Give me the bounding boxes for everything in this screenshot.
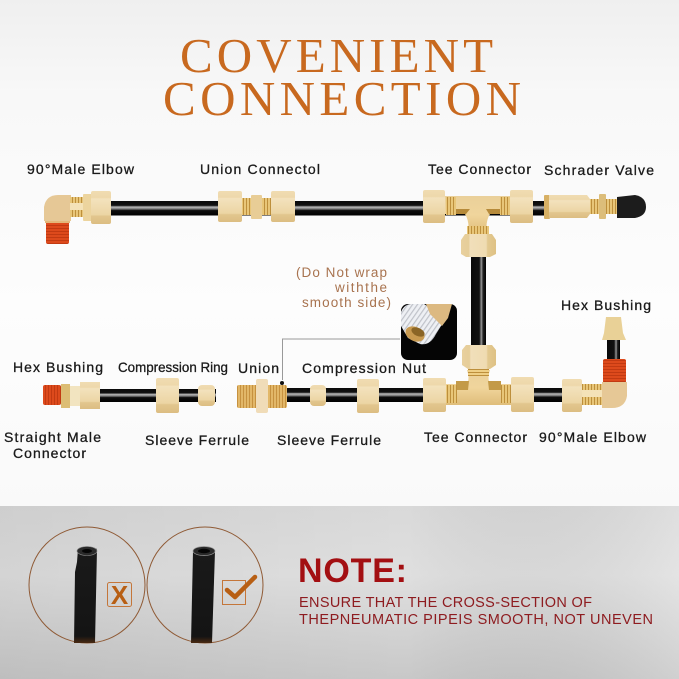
label: 90 male elbow top: 90°Male Elbow: [27, 161, 135, 177]
note text: ENSURE THAT THE CROSS-SECTION OF: [299, 595, 592, 611]
heading: note: NOTE:: [298, 552, 407, 590]
label: compression nut: Compression Nut: [302, 360, 426, 376]
callout leader line: [280, 339, 400, 385]
label: sleeve ferrule right: Sleeve Ferrule: [277, 432, 381, 448]
title: CONNECTION: [163, 71, 521, 126]
circle: incorrect cut pipe: [29, 527, 145, 643]
title: [163, 28, 521, 126]
label: tee connector bottom: Tee Connector: [424, 429, 527, 445]
top-left 90 degree male elbow: [44, 191, 111, 244]
label: sleeve ferrule left: Sleeve Ferrule: [145, 432, 249, 448]
wrap warning note: (Do Not wrap: [296, 265, 387, 280]
labels: [4, 161, 654, 461]
sleeve ferrule left: [198, 385, 215, 406]
label: 90 male elbow bottom: 90°Male Elbow: [539, 429, 647, 445]
title: COVENIENT: [180, 28, 493, 83]
vertical pipe between tee connectors: [471, 255, 486, 347]
label: union connectol: Union Connectol: [200, 161, 320, 177]
panel: note: [0, 506, 679, 679]
top horizontal pipe: [105, 201, 550, 216]
union connector: [218, 191, 295, 222]
compression nut right: [357, 379, 379, 413]
label: schrader valve: Schrader Valve: [544, 162, 654, 178]
note text: [299, 595, 653, 628]
sleeve ferrule right: [310, 385, 326, 406]
label: straight male connector: [4, 429, 101, 461]
icon: X mark: X: [111, 580, 129, 610]
wrap warning note: withthe: [334, 280, 387, 295]
compression nut left: [156, 378, 179, 413]
icon: check mark: [222, 577, 255, 604]
inset photo: threaded union: [401, 304, 457, 360]
lower tee connector: [423, 345, 534, 412]
label: straight male connector: Connector: [13, 445, 86, 461]
wrap warning note: [296, 265, 391, 310]
circle: correct cut pipe: [147, 527, 263, 643]
threaded union: [237, 379, 287, 413]
note text: THEPNEUMATIC PIPEIS SMOOTH, NOT UNEVEN: [299, 612, 653, 628]
label: straight male connector: Straight Male: [4, 429, 101, 445]
label: hex bushing left: Hex Bushing: [13, 359, 103, 375]
bottom pipe assembly: [43, 317, 627, 413]
lower pipe left segment: [100, 389, 216, 402]
schrader valve: [544, 194, 646, 219]
wrap warning note: smooth side): [302, 295, 391, 310]
right 90 degree male elbow with hex bushing: [562, 317, 627, 412]
label: compression ring: Compression Ring: [118, 359, 228, 375]
label: hex bushing right: Hex Bushing: [561, 297, 651, 313]
label: tee connector top: Tee Connector: [428, 161, 531, 177]
straight male connector: [43, 382, 100, 409]
top pipe assembly: [44, 190, 646, 347]
label: union: Union: [238, 360, 279, 376]
lower pipe right segment: [287, 388, 563, 402]
top tee connector: [423, 190, 533, 257]
